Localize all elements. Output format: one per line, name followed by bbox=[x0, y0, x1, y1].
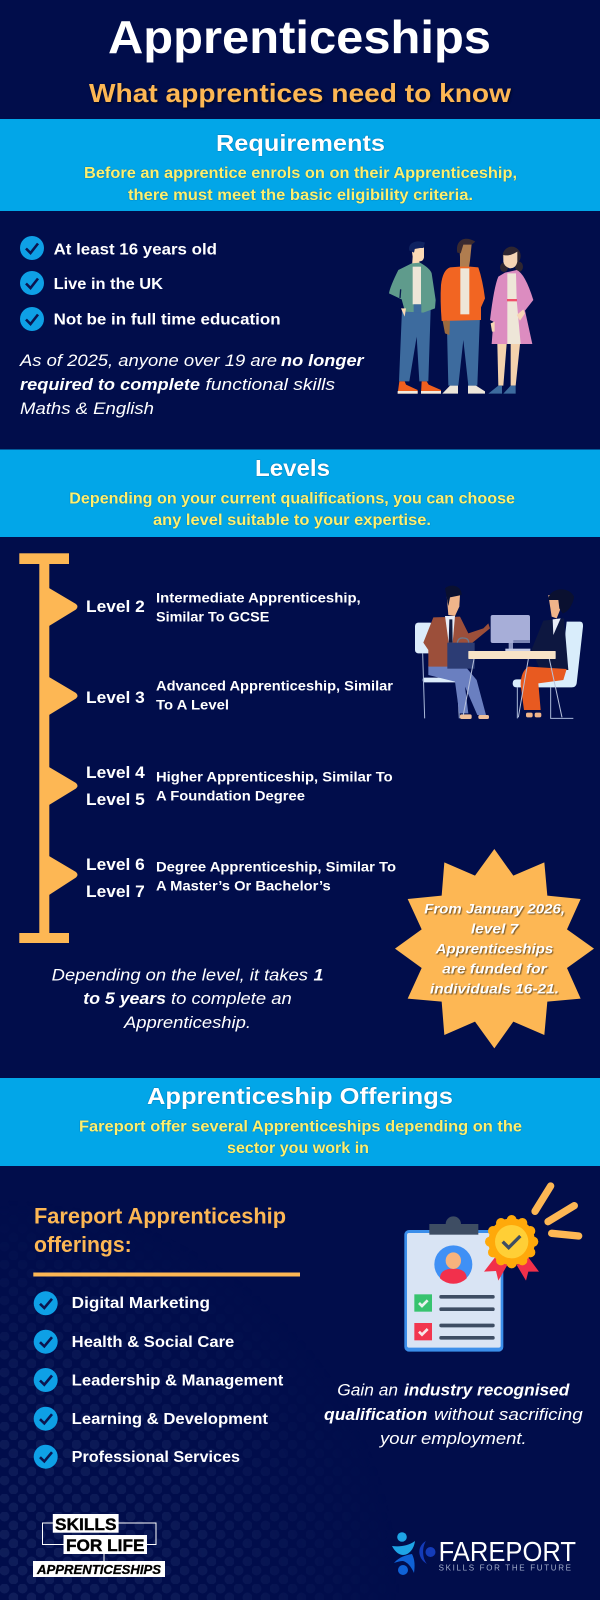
text block: duration note: Apprenticeship. bbox=[123, 1013, 251, 1032]
offerings intro text: Fareport offer several Apprenticeships depending on the bbox=[79, 1119, 522, 1136]
level 4 and 5 row: Level 4 bbox=[86, 763, 145, 782]
text block: functional skills note: Maths & English bbox=[20, 399, 154, 418]
text block: duration note: 1 bbox=[314, 966, 324, 985]
text block: qualification note: without sacrificing bbox=[434, 1405, 583, 1424]
illustration: two people at a desk bbox=[415, 586, 583, 719]
logo: fareport bbox=[392, 1532, 576, 1575]
offerings checklist bbox=[34, 1291, 284, 1469]
panel: offerings header band bbox=[0, 1078, 600, 1166]
man seated bbox=[423, 586, 490, 719]
requirements intro text: Before an apprentice enrols on on their Apprenticeship, bbox=[84, 165, 517, 182]
logo: skills for life apprenticeships: APPRENTICESHIPS bbox=[36, 1563, 162, 1577]
computer monitor bbox=[491, 615, 530, 651]
offerings intro text bbox=[79, 1119, 522, 1157]
text block: qualification note: qualification bbox=[324, 1405, 427, 1424]
text block: duration note: Depending on the level, it takes bbox=[52, 966, 309, 985]
level 4 and 5 row: Higher Apprenticeship, Similar To bbox=[156, 769, 393, 785]
text block: functional skills note: required to complete bbox=[20, 375, 200, 394]
text block: duration note: to complete an bbox=[171, 989, 292, 1008]
desk bbox=[463, 651, 562, 717]
text block: qualification note: industry recognised bbox=[404, 1381, 570, 1400]
levels intro text: any level suitable to your expertise. bbox=[153, 512, 431, 529]
check item: education bbox=[20, 307, 281, 331]
text block: functional skills note: As of 2025, anyone over 19 are bbox=[19, 351, 277, 370]
requirements intro text: there must meet the basic eligibility criteria. bbox=[128, 187, 473, 204]
check item: education: Not be in full time education bbox=[54, 312, 281, 328]
level 4 and 5 row: A Foundation Degree bbox=[156, 788, 305, 804]
illustration: certificate clipboard with medal bbox=[404, 1186, 579, 1352]
text block: functional skills note: no longer bbox=[281, 351, 365, 370]
level 3 row: Advanced Apprenticeship, Similar bbox=[156, 678, 394, 694]
offering: digital marketing: Digital Marketing bbox=[72, 1295, 210, 1312]
panel: levels header band bbox=[0, 450, 600, 537]
level 2 row: Intermediate Apprenticeship, bbox=[156, 590, 361, 606]
heading: requirements: Requirements bbox=[216, 130, 385, 156]
timeline: levels axis bbox=[19, 553, 78, 943]
offering: leadership and management: Leadership & Management bbox=[72, 1372, 284, 1389]
level 4 and 5 row bbox=[86, 763, 393, 809]
callout text bbox=[424, 900, 565, 996]
panel: requirements header band bbox=[0, 119, 600, 211]
level 2 row: Level 2 bbox=[86, 597, 145, 616]
callout text: From January 2026, bbox=[424, 900, 565, 916]
text block: qualification note: Gain an bbox=[337, 1381, 398, 1400]
illustration: three young people bbox=[389, 239, 533, 394]
level 3 row bbox=[86, 678, 394, 713]
callout: level 7 funding starburst bbox=[395, 849, 594, 1048]
offerings intro text: sector you work in bbox=[227, 1140, 369, 1157]
offering: health and social care bbox=[34, 1330, 234, 1354]
level 6 and 7 row: Level 6 bbox=[86, 855, 145, 874]
callout text: Apprenticeships bbox=[435, 940, 554, 956]
offering: professional services: Professional Services bbox=[72, 1449, 240, 1466]
heading: fareport offerings: Fareport Apprenticeship bbox=[34, 1203, 286, 1228]
left chair bbox=[415, 623, 459, 718]
text block: functional skills note: functional skills bbox=[206, 375, 336, 394]
level 4 and 5 row: Level 5 bbox=[86, 790, 145, 809]
check item: residence bbox=[20, 271, 164, 295]
level 6 and 7 row: Degree Apprenticeship, Similar To bbox=[156, 859, 396, 875]
check item: residence: Live in the UK bbox=[54, 276, 164, 293]
offering: professional services bbox=[34, 1445, 240, 1469]
subtitle: What apprentices need to know bbox=[89, 78, 512, 108]
level 2 row: Similar To GCSE bbox=[156, 609, 269, 625]
level 6 and 7 row bbox=[86, 855, 396, 901]
logo: skills for life apprenticeships: SKILLS bbox=[55, 1515, 116, 1534]
woman seated bbox=[521, 589, 574, 717]
heading: levels: Levels bbox=[255, 455, 330, 481]
logo: fareport: FAREPORT bbox=[439, 1536, 576, 1567]
callout text: individuals 16-21. bbox=[430, 980, 559, 996]
text block: functional skills note bbox=[19, 351, 365, 418]
check item: age bbox=[20, 236, 217, 260]
level 6 and 7 row: A Master’s Or Bachelor’s bbox=[156, 878, 331, 894]
offering: learning and development: Learning & Development bbox=[72, 1411, 269, 1428]
right chair bbox=[513, 622, 583, 718]
logo: skills for life apprenticeships: FOR LIFE bbox=[66, 1536, 144, 1555]
figure: man in green jacket bbox=[389, 241, 441, 394]
level 3 row: To A Level bbox=[156, 697, 229, 713]
levels intro text: Depending on your current qualifications, you can choose bbox=[69, 490, 515, 507]
logo: fareport: SKILLS FOR THE FUTURE bbox=[439, 1564, 571, 1572]
offering: health and social care: Health & Social Care bbox=[72, 1334, 234, 1351]
heading: fareport offerings: offerings: bbox=[34, 1232, 132, 1257]
level 2 row bbox=[86, 590, 361, 625]
level 6 and 7 row: Level 7 bbox=[86, 882, 145, 901]
title: Apprenticeships bbox=[108, 11, 491, 63]
text block: qualification note: your employment. bbox=[379, 1429, 527, 1448]
logo mark bbox=[392, 1532, 436, 1575]
heading: apprenticeship offerings: Apprenticeship Offerings bbox=[147, 1083, 453, 1109]
text block: duration note: to 5 years bbox=[83, 989, 166, 1008]
level 3 row: Level 3 bbox=[86, 688, 145, 707]
medal bbox=[484, 1215, 539, 1281]
clipboard bbox=[404, 1216, 503, 1352]
logo: skills for life apprenticeships bbox=[33, 1514, 165, 1577]
offering: learning and development bbox=[34, 1407, 269, 1431]
heading: fareport offerings bbox=[33, 1203, 300, 1276]
check item: age: At least 16 years old bbox=[54, 242, 217, 258]
text block: duration note bbox=[52, 966, 323, 1032]
text block: qualification note bbox=[324, 1381, 583, 1448]
rays bbox=[535, 1186, 579, 1236]
figure: woman in pink coat bbox=[488, 247, 533, 394]
offering: digital marketing bbox=[34, 1291, 210, 1315]
callout text: level 7 bbox=[471, 920, 520, 936]
callout text: are funded for bbox=[442, 960, 548, 976]
panel: requirements checklist bbox=[20, 236, 281, 331]
levels intro text bbox=[69, 490, 515, 529]
requirements intro text bbox=[84, 165, 517, 204]
figure: man in orange jacket bbox=[441, 239, 485, 394]
offering: leadership and management bbox=[34, 1368, 284, 1392]
